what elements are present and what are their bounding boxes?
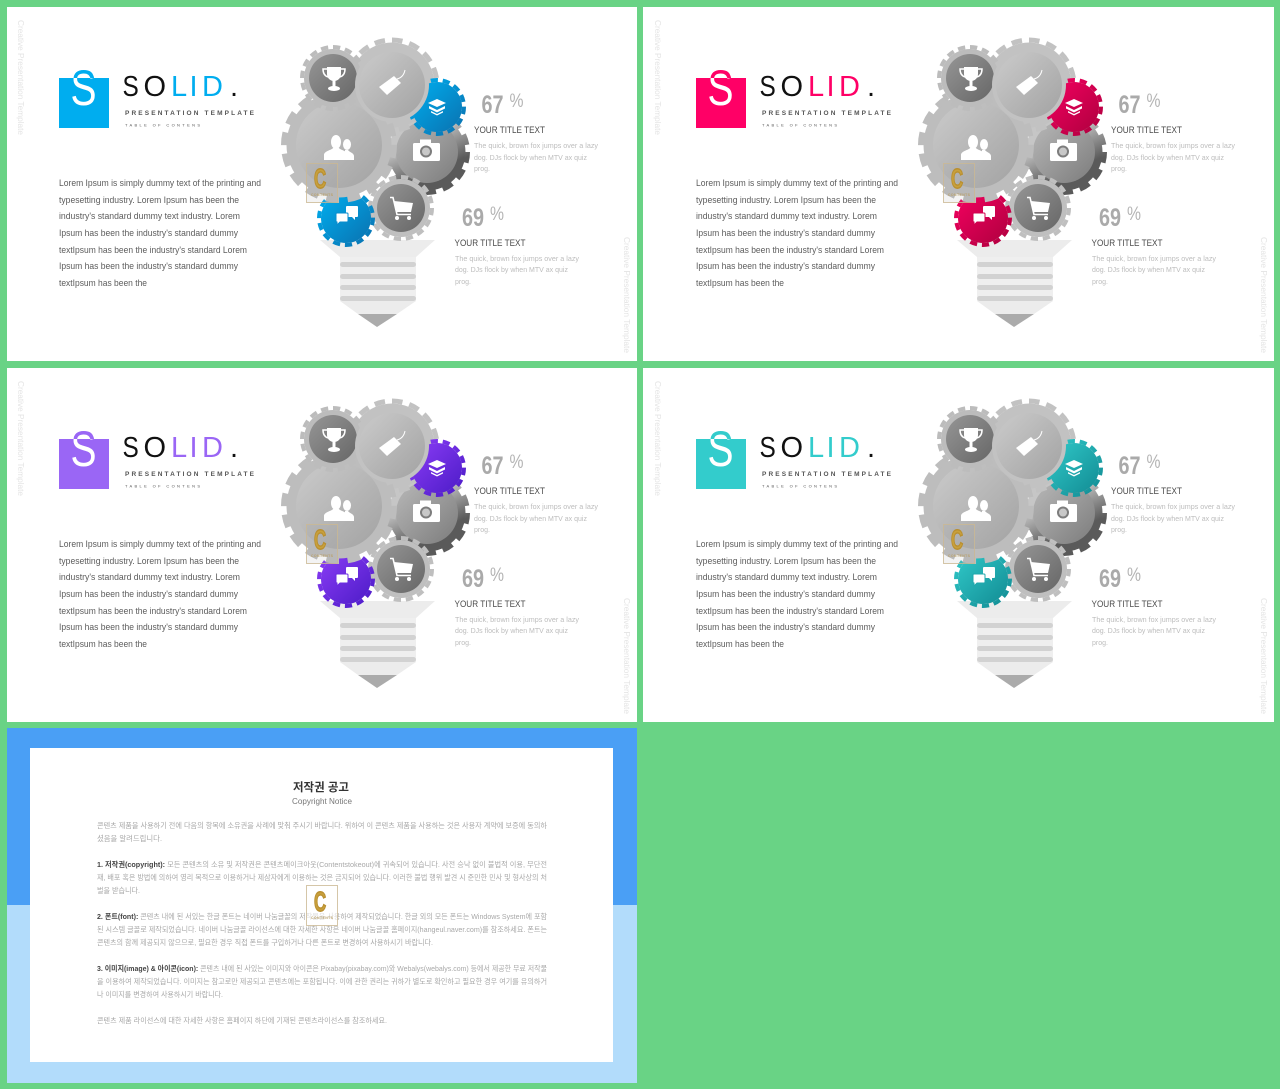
notice body text: 콘텐츠 제품 라이선스에 대한 자세한 사항은 홈페이지 하단에 기재된 콘텐츠라이선스를 참조하세요. [97, 1015, 387, 1025]
icon: graduation cap [428, 460, 446, 476]
subtitle: PRESENTATION TEMPLATE [125, 110, 255, 117]
side label right: Creative Presentation Template [1259, 237, 1268, 354]
stat 67%: The quick, brown fox jumps over a lazy [1111, 141, 1235, 150]
side label left: Creative Presentation Template [16, 20, 25, 136]
stat 69% [1092, 204, 1216, 286]
light bulb of gears [284, 40, 468, 327]
light bulb of gears [921, 40, 1104, 327]
front gears [921, 408, 1031, 561]
notice body text: 3. 이미지(image) & 아이콘(icon): 콘텐츠 내에 된 사있는 이미지와 아이콘은 Pixabay(pixabay.com)와 Webalys(webalys.com) 등에서 제공한 무료 저작물 [97, 963, 547, 973]
body paragraph: textIpsum has been the industry's standard Lorem [59, 606, 247, 616]
watermark: C [314, 524, 326, 555]
notice body text: 콘텐츠 제품을 사용하기 전에 다음의 항목에 소유권을 사례에 맞춰 주시기 바랍니다. 위하여 이 콘텐츠 제품을 사용하는 것은 사용자 계약에 보증에 동의하 [97, 820, 547, 830]
watermark [306, 886, 338, 926]
front gears [921, 47, 1031, 200]
accent gear lower [319, 552, 373, 606]
icon: people [324, 496, 354, 521]
logo mark: S [708, 59, 734, 116]
stat 69%: YOUR TITLE TEXT [454, 599, 526, 610]
stat 67%: YOUR TITLE TEXT [1111, 125, 1182, 136]
title SOLID: O. [780, 71, 875, 103]
stat 67%: % [1146, 452, 1161, 473]
stat 67%: prog. [1111, 525, 1127, 534]
logo mark [59, 431, 109, 489]
watermark: CONTENTS [948, 193, 971, 197]
icon: camera [1050, 500, 1077, 522]
body paragraph: Ipsum has been the industry's standard dummy [696, 622, 875, 632]
icon: camera [1050, 140, 1077, 161]
stat 69% [1092, 565, 1216, 647]
panel: slide purple [7, 368, 637, 722]
icon: graduation cap [428, 99, 446, 116]
logo mark: S [708, 420, 734, 477]
stat 69%: 69 [1099, 204, 1121, 232]
stat 69%: 69 [462, 565, 484, 593]
stat 69%: YOUR TITLE TEXT [1092, 238, 1163, 249]
subtitle: PRESENTATION TEMPLATE [762, 110, 892, 117]
body paragraph: typesetting industry. Lorem Ipsum has been the [59, 195, 239, 205]
stat 69%: The quick, brown fox jumps over a lazy [1092, 254, 1216, 263]
stat 69%: 69 [462, 204, 484, 232]
icon: graduation cap [1065, 99, 1083, 116]
stat 67% [474, 452, 598, 534]
icon: graduation cap [1065, 460, 1083, 476]
watermark [944, 163, 974, 202]
light bulb of gears [284, 401, 468, 688]
front gears [284, 408, 394, 561]
body paragraph: industry's standard dummy text industry. Lorem [59, 211, 240, 221]
notice body text: 나 이미지를 변경하여 사용하시기 바랍니다. [97, 989, 223, 999]
back gears [347, 401, 468, 600]
watermark [306, 524, 338, 564]
bulb base [320, 240, 435, 327]
title SOLID: LID [171, 432, 223, 464]
watermark: C [314, 886, 326, 917]
bulb base [320, 601, 435, 688]
stat 67%: 67 [1118, 452, 1140, 480]
stat 69%: % [1127, 204, 1141, 225]
icon: cart [390, 198, 413, 220]
stat 67%: The quick, brown fox jumps over a lazy [1111, 502, 1235, 511]
stat 69% [454, 565, 579, 647]
icon: people [961, 496, 991, 521]
side label left: Creative Presentation Template [16, 381, 25, 497]
stat 67%: dog. DJs flock by when MTV ax quiz [1111, 153, 1224, 162]
body paragraph: textIpsum has been the industry's standard Lorem [696, 245, 884, 255]
stat 67%: dog. DJs flock by when MTV ax quiz [474, 514, 587, 523]
table of contents caption: TABLE OF CONTENS [125, 122, 200, 128]
stat 69%: % [490, 565, 504, 586]
panel: slide blue [7, 7, 637, 361]
tag gear disc [992, 48, 1066, 122]
accent gear lower [319, 191, 373, 245]
body paragraph: typesetting industry. Lorem Ipsum has been the [696, 195, 876, 205]
watermark [306, 163, 338, 202]
body paragraph: Ipsum has been the industry's standard dummy [59, 261, 238, 271]
watermark [944, 524, 974, 564]
title SOLID: S [760, 431, 776, 463]
icon: trophy [960, 67, 982, 91]
body paragraph: textIpsum has been the industry's standard Lorem [696, 606, 884, 616]
notice body text: 된 시스템 글꼴로 제작되었습니다. 네이버 나눔글꼴 라이선스에 대한 자세한 사항은 네이버 나눔글꼴 홈페이지(hangeul.naver.com)를 참조하세요. 폰트는 [97, 924, 547, 934]
notice body text: 셨음을 알려드립니다. [97, 833, 162, 843]
body paragraph [59, 539, 261, 649]
title SOLID: LID [808, 432, 860, 464]
stat 69%: % [490, 204, 504, 225]
stat 67%: 67 [1118, 91, 1140, 119]
stat 69%: prog. [455, 277, 471, 286]
icon: tag [379, 431, 405, 456]
stat 69%: 69 [1099, 565, 1121, 593]
watermark: C [951, 524, 963, 555]
stat 69%: The quick, brown fox jumps over a lazy [1092, 615, 1216, 624]
icon: people [324, 135, 354, 160]
title SOLID: S [122, 70, 139, 102]
stat 69% [454, 204, 579, 286]
side label left: Creative Presentation Template [653, 381, 662, 497]
icon: trophy [960, 428, 982, 452]
body paragraph [696, 178, 898, 288]
front gears [284, 47, 394, 200]
table of contents caption: TABLE OF CONTENS [762, 484, 837, 488]
stat 67% [1111, 452, 1235, 534]
body paragraph: Lorem Ipsum is simply dummy text of the printing and [59, 539, 261, 549]
stat 67%: % [510, 452, 524, 473]
body paragraph: textIpsum has been the industry's standard Lorem [59, 245, 247, 255]
notice body text: 2. 폰트(font): 콘텐츠 내에 된 서있는 한글 폰트는 네이버 나눔글꼴의 저작물을 사용하여 제작되었습니다. 한글 외의 모든 폰트는 Windows System에 포함 [97, 911, 547, 921]
panel: copyright notice [7, 728, 637, 1083]
body paragraph: Lorem Ipsum is simply dummy text of the printing and [59, 178, 261, 188]
stat 67%: dog. DJs flock by when MTV ax quiz [474, 153, 587, 162]
notice heading: 저작권 공고 [293, 780, 349, 794]
logo mark: S [70, 59, 97, 116]
notice subheading: Copyright Notice [292, 797, 353, 806]
icon: trophy [323, 67, 345, 91]
tag gear disc [355, 409, 429, 483]
watermark: CONTENTS [311, 554, 334, 558]
watermark: C [314, 163, 326, 194]
panel: slide pink [643, 7, 1274, 361]
notice body text: 재, 배포 혹은 방법에 의하여 영리 목적으로 이용하거나 제삼자에게 이용하는 것은 금지되어 있습니다. 이러한 불법 행위 발견 시 준민한 민사 및 형사상의 처 [97, 872, 547, 882]
bulb base [957, 240, 1072, 327]
icon: chat bubbles [973, 206, 995, 225]
body paragraph: Lorem Ipsum is simply dummy text of the printing and [696, 539, 898, 549]
tag gear disc [992, 409, 1066, 483]
stat 67%: 67 [482, 91, 504, 119]
notice body text [97, 820, 547, 1025]
stat 67%: 67 [482, 452, 504, 480]
body paragraph: industry's standard dummy text industry. Lorem [59, 572, 240, 582]
body paragraph: textIpsum has been the [696, 278, 784, 288]
table of contents caption: TABLE OF CONTENS [762, 122, 837, 128]
icon: chat bubbles [973, 567, 995, 586]
body paragraph: Ipsum has been the industry's standard dummy [59, 622, 238, 632]
stat 69%: The quick, brown fox jumps over a lazy [455, 254, 579, 263]
body paragraph: Ipsum has been the industry's standard dummy [59, 589, 238, 599]
stat 69%: The quick, brown fox jumps over a lazy [455, 615, 579, 624]
notice body text: 벌을 받습니다. [97, 885, 140, 895]
stat 69%: prog. [1092, 638, 1108, 647]
icon: trophy [323, 428, 345, 452]
icon: chat bubbles [336, 206, 358, 225]
logo mark: S [70, 420, 97, 477]
notice body text: 콘텐츠의 함께 제공되지 않으므로, 필요한 경우 직접 폰트를 구입하거나 다른 폰트로 변경하여 사용하시기 바랍니다. [97, 937, 433, 947]
icon: tag [1016, 431, 1042, 456]
stat 67%: The quick, brown fox jumps over a lazy [474, 141, 598, 150]
title SOLID: O. [144, 432, 238, 464]
stat 67%: The quick, brown fox jumps over a lazy [474, 502, 598, 511]
stat 67%: prog. [474, 525, 490, 534]
stat 69%: dog. DJs flock by when MTV ax quiz [1092, 626, 1205, 635]
body paragraph: textIpsum has been the [59, 639, 147, 649]
side label right: Creative Presentation Template [622, 598, 631, 715]
accent gear lower [956, 552, 1010, 606]
icon: chat bubbles [336, 567, 358, 586]
icon: cart [1027, 558, 1050, 581]
title SOLID: O. [780, 432, 875, 464]
title SOLID: S [122, 431, 139, 463]
side label right: Creative Presentation Template [622, 237, 631, 354]
side label right: Creative Presentation Template [1259, 598, 1268, 715]
body paragraph: industry's standard dummy text industry. Lorem [696, 211, 877, 221]
stat 69%: prog. [1092, 277, 1108, 286]
logo mark [696, 70, 746, 128]
body paragraph [696, 539, 898, 649]
stat 67%: dog. DJs flock by when MTV ax quiz [1111, 514, 1224, 523]
stat 69%: YOUR TITLE TEXT [454, 238, 526, 249]
icon: tag [379, 70, 405, 95]
body paragraph: Lorem Ipsum is simply dummy text of the printing and [696, 178, 898, 188]
body paragraph: textIpsum has been the [696, 639, 784, 649]
icon: cart [1027, 198, 1050, 220]
stat 67%: YOUR TITLE TEXT [474, 486, 545, 497]
light bulb of gears [921, 401, 1104, 688]
logo mark: S [70, 420, 97, 477]
watermark: C [951, 163, 963, 194]
title SOLID: LID [808, 71, 860, 103]
table of contents caption: TABLE OF CONTENS [125, 484, 200, 488]
back gears [347, 40, 468, 239]
stat 67%: prog. [1111, 164, 1127, 173]
watermark: CONTENTS [311, 193, 334, 197]
panel: slide teal [643, 368, 1274, 722]
accent gear upper [410, 80, 464, 134]
stat 69%: prog. [455, 638, 471, 647]
tag gear disc [355, 48, 429, 122]
stat 67%: YOUR TITLE TEXT [474, 125, 545, 136]
icon: people [961, 135, 991, 160]
side label left: Creative Presentation Template [653, 20, 662, 136]
body paragraph: Ipsum has been the industry's standard dummy [59, 228, 238, 238]
stat 67%: YOUR TITLE TEXT [1111, 486, 1182, 497]
body paragraph: Ipsum has been the industry's standard dummy [696, 261, 875, 271]
notice body text: 을 이용하여 제작되었습니다. 이미지는 참고로만 제공되고 콘텐츠에는 포함됩니다. 이에 관한 권리는 귀하가 별도로 확인하고 필요한 경우 여기를 유의하거 [97, 976, 547, 986]
body paragraph [59, 178, 261, 288]
body paragraph: industry's standard dummy text industry. Lorem [696, 572, 877, 582]
back gears [984, 40, 1104, 239]
accent gear upper [1047, 80, 1101, 134]
body paragraph: textIpsum has been the [59, 278, 147, 288]
logo mark: S [708, 59, 734, 116]
logo mark: S [70, 59, 97, 116]
icon: camera [413, 140, 440, 161]
stat 67%: % [510, 91, 524, 112]
stat 67% [474, 91, 598, 173]
icon: tag [1016, 70, 1042, 95]
title SOLID: LID [171, 71, 223, 103]
title SOLID: S [760, 70, 776, 102]
body paragraph: Ipsum has been the industry's standard dummy [696, 228, 875, 238]
watermark: CONTENTS [311, 916, 334, 920]
stat 67%: prog. [474, 164, 490, 173]
stat 69%: % [1127, 565, 1141, 586]
stat 67% [1111, 91, 1235, 173]
watermark: CONTENTS [948, 554, 971, 558]
bulb base [957, 601, 1072, 688]
accent gear lower [956, 191, 1010, 245]
body paragraph: typesetting industry. Lorem Ipsum has been the [59, 556, 239, 566]
logo mark [59, 70, 109, 128]
stat 69%: dog. DJs flock by when MTV ax quiz [1092, 265, 1205, 274]
accent gear upper [1047, 441, 1101, 495]
logo mark: S [708, 420, 734, 477]
body paragraph: typesetting industry. Lorem Ipsum has been the [696, 556, 876, 566]
logo mark [696, 431, 746, 489]
title SOLID: O. [144, 71, 238, 103]
notice body text: 1. 저작권(copyright): 모든 콘텐츠의 소유 및 저작권은 콘텐츠메이크아웃(Contentstokeout)에 귀속되어 있습니다. 사전 승낙 없이 불법적 이용, 무단전 [97, 859, 547, 869]
subtitle: PRESENTATION TEMPLATE [762, 471, 892, 478]
back gears [984, 401, 1104, 600]
stat 67%: % [1146, 91, 1161, 112]
icon: camera [413, 500, 440, 522]
subtitle: PRESENTATION TEMPLATE [125, 471, 255, 478]
accent gear upper [410, 441, 464, 495]
stat 69%: dog. DJs flock by when MTV ax quiz [455, 265, 568, 274]
stat 69%: dog. DJs flock by when MTV ax quiz [455, 626, 568, 635]
icon: cart [390, 558, 413, 581]
body paragraph: Ipsum has been the industry's standard dummy [696, 589, 875, 599]
stat 69%: YOUR TITLE TEXT [1092, 599, 1163, 610]
